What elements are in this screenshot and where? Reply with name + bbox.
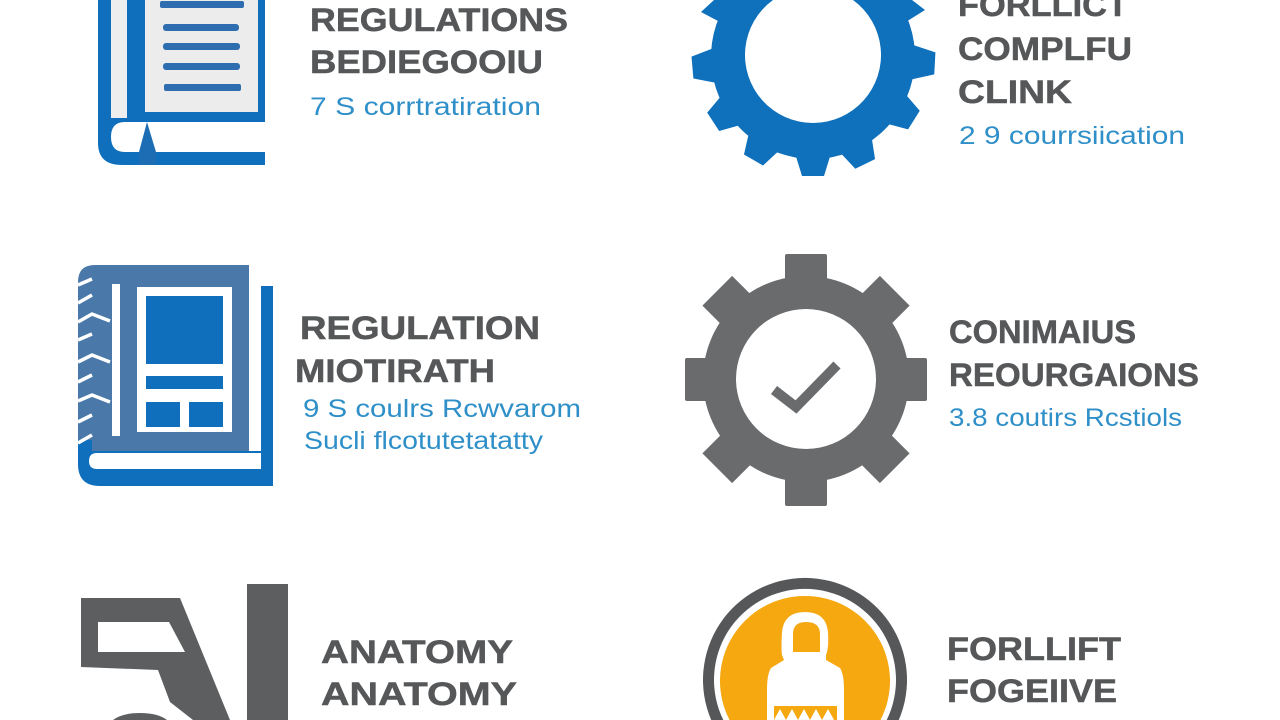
heading: fogeiive: FOGEIIVE xyxy=(947,673,1117,709)
caption line two: Sucli flcotutetatatty xyxy=(304,427,544,455)
panel: grey gear with check xyxy=(685,254,1199,506)
heading: conimaius: CONIMAIUS xyxy=(949,314,1136,350)
heading: second line: BEDIEGOOIU xyxy=(310,44,543,80)
heading: complfu: COMPLFU xyxy=(958,31,1132,67)
heading: anatomy: ANATOMY xyxy=(321,634,513,670)
heading: reolirgaions: REOURGAIONS xyxy=(949,357,1199,393)
heading: regulations: REGULATIONS xyxy=(310,2,568,38)
heading: second line: MIOTIRATH xyxy=(295,353,495,389)
icon: open book with text lines xyxy=(98,0,265,165)
caption: 3.8 coutirs Rcstiols xyxy=(949,404,1182,432)
panel: regulations book xyxy=(98,0,568,165)
panel: forklift xyxy=(703,578,1122,720)
panel: blue gear xyxy=(691,0,1185,176)
caption line one: 9 S coulrs Rcwvarom xyxy=(303,395,581,423)
icon: spiral manual xyxy=(78,265,273,486)
heading: forllift: FORLLIFT xyxy=(947,631,1122,667)
heading: clink: CLINK xyxy=(958,74,1072,110)
heading: anatomy repeated: ANATOMY xyxy=(321,676,517,712)
heading: regulation: REGULATION xyxy=(300,310,540,346)
icon: grey gear with checkmark xyxy=(685,254,927,506)
caption: 2 9 courrsiication xyxy=(959,122,1185,150)
caption: 7 S corrtratiration xyxy=(310,93,541,121)
panel: regulation manual xyxy=(78,265,581,486)
icon: forklift silhouette xyxy=(81,584,288,720)
panel: anatomy xyxy=(81,584,517,720)
icon: orange badge with figure xyxy=(703,578,907,720)
icon: blue gear xyxy=(691,0,936,176)
